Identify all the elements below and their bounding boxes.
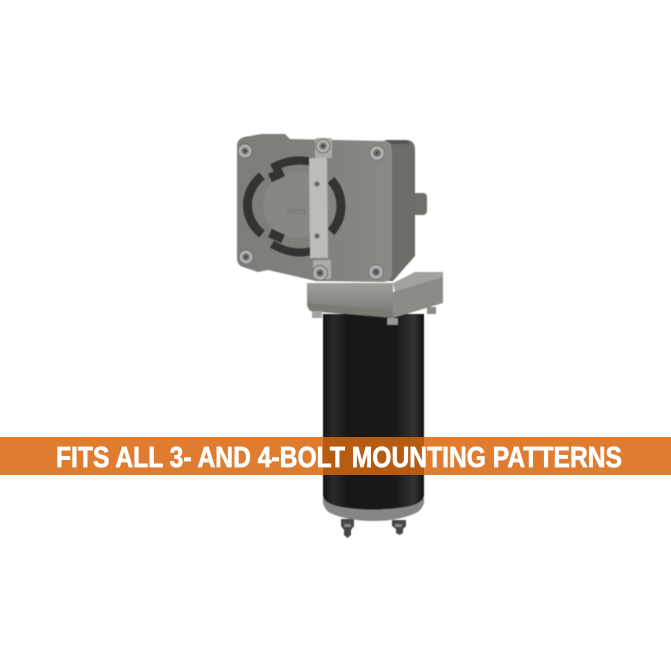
circular cover with slots: 53925 [286,209,306,216]
gear housing side and shaft [385,140,427,281]
orange banner [0,437,671,475]
housing bolts [238,138,385,281]
mounting block [307,272,443,325]
motor end cap [323,498,424,521]
metal strap [309,138,332,279]
product: gear motor [237,134,443,538]
motor terminal studs [341,519,406,538]
gear housing front plate [237,134,392,282]
banner shaded over motor [323,437,424,475]
black motor body [323,314,424,510]
circular cover with slots [247,160,341,252]
